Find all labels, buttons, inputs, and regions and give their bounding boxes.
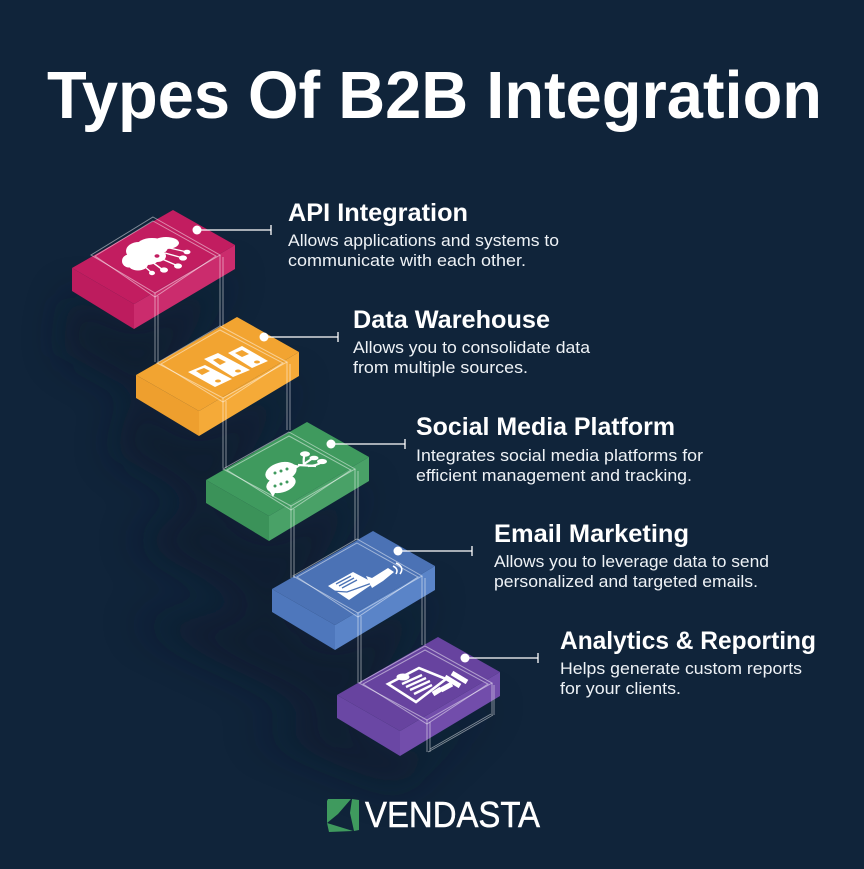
- callout: API Integration: Allows applications and systems to: [288, 231, 559, 250]
- panel: Data Warehouse block: [136, 317, 299, 436]
- callout: Analytics & Reporting: for your clients.: [560, 679, 681, 698]
- callout: Analytics & Reporting: [460, 627, 816, 698]
- callout: Data Warehouse: [260, 306, 591, 377]
- callout: Social Media Platform: efficient management and tracking.: [416, 466, 692, 485]
- callout: Data Warehouse: from multiple sources.: [353, 358, 528, 377]
- callout: Analytics & Reporting: Helps generate custom reports: [560, 659, 802, 678]
- title: Types Of B2B Integration: [47, 58, 822, 133]
- callout: API Integration: communicate with each other.: [288, 251, 526, 270]
- callout: Data Warehouse: Data Warehouse: [353, 306, 550, 334]
- panel: Social Media Platform block: [206, 422, 369, 541]
- logo: Vendasta: VENDASTA: [365, 794, 540, 835]
- icon: cloud network: [122, 237, 190, 275]
- icon: chat bubbles and usb: [263, 451, 327, 497]
- callout: Email Marketing: Allows you to leverage data to send: [494, 552, 769, 571]
- panel: API Integration block: [72, 210, 235, 329]
- callout: API Integration: API Integration: [288, 199, 468, 227]
- callout: Data Warehouse: Allows you to consolidate data: [353, 338, 591, 357]
- callout: Social Media Platform: Integrates social media platforms for: [416, 446, 703, 465]
- panel: Analytics & Reporting block: [337, 637, 500, 756]
- callout: Email Marketing: [394, 520, 769, 591]
- icon: clipboard and bars: [388, 668, 467, 702]
- callout: Analytics & Reporting: Analytics & Reporting: [560, 627, 816, 655]
- callout: Social Media Platform: [326, 413, 703, 485]
- callout: Email Marketing: personalized and targeted emails.: [494, 572, 758, 591]
- wireframe connectors: [91, 217, 494, 752]
- callout: API Integration: [192, 199, 559, 270]
- icon: servers: [188, 346, 268, 387]
- icon: envelope and megaphone: [328, 563, 402, 600]
- panel: Email Marketing block: [272, 531, 435, 650]
- callout: Email Marketing: Email Marketing: [494, 520, 689, 548]
- callout: Social Media Platform: Social Media Platform: [416, 413, 675, 441]
